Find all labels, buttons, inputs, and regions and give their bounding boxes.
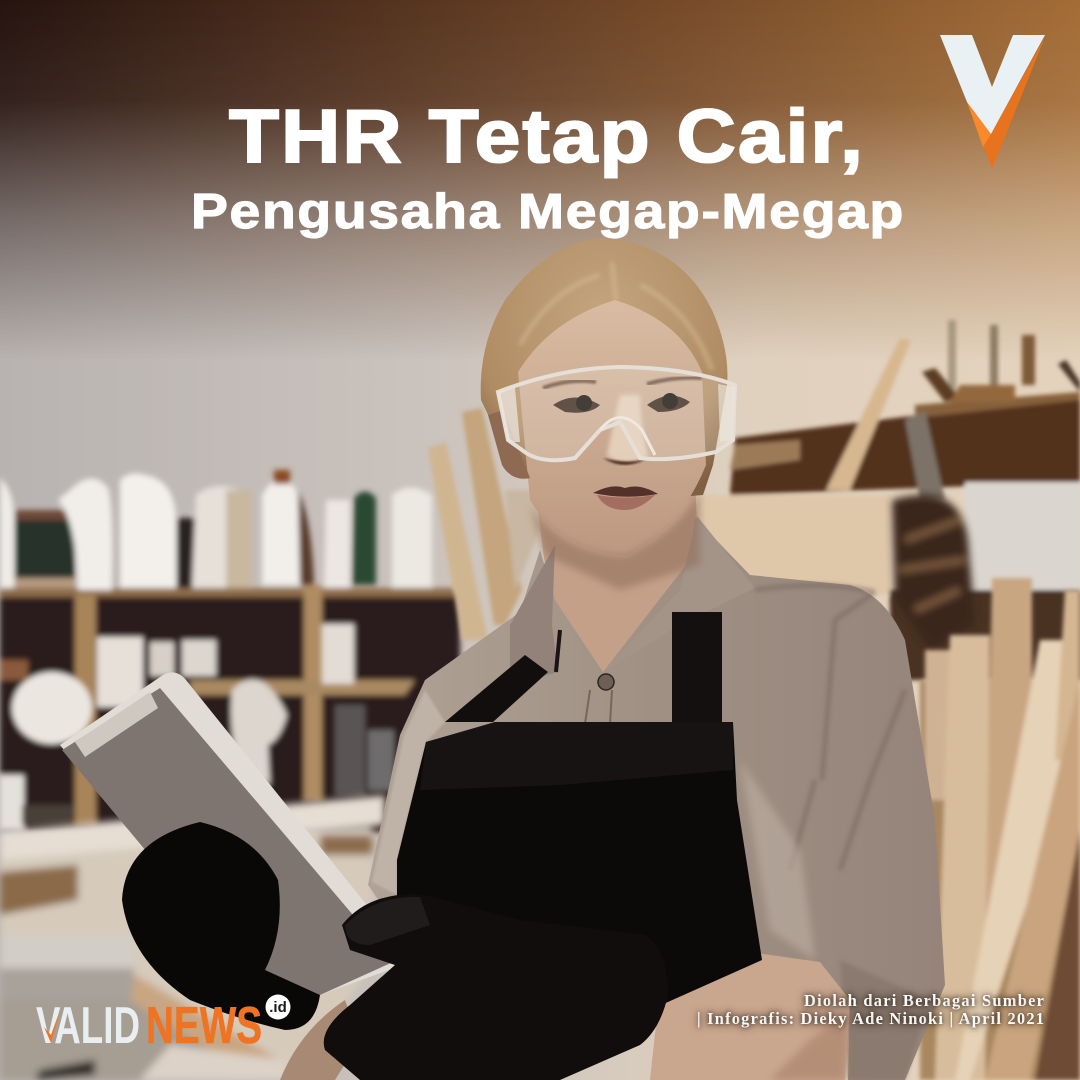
hair: [481, 238, 727, 500]
background: leaning wood boards behind shoulder: [428, 408, 540, 640]
safety goggles: [498, 367, 735, 460]
tablet: [60, 672, 407, 1000]
forearm: [650, 940, 850, 1080]
nose: [607, 395, 648, 464]
background: counter and workbench lower left: [0, 795, 385, 1080]
left gloved hand: [122, 822, 320, 1030]
title: Pengusaha Megap-Megap: [191, 185, 905, 239]
neck: [535, 480, 700, 680]
shelf contents: [0, 624, 394, 830]
shirt: [368, 518, 945, 1080]
title: THR Tetap Cair,: [229, 94, 865, 178]
face: [518, 300, 706, 556]
source credit: Diolah dari Berbagai Sumber: [804, 991, 1044, 1010]
source credit: | Infografis: Dieky Ade Ninoki | April 2021: [697, 1009, 1044, 1028]
logo: VALIDNEWS.id bottom left: VALID: [36, 997, 140, 1055]
ear: [488, 410, 530, 479]
hair highlight: [520, 262, 712, 370]
left sleeve light: [372, 690, 445, 895]
apron: [397, 612, 762, 1010]
jaw shadow: [530, 490, 700, 590]
source credit: [697, 991, 1044, 1028]
lips: [593, 486, 658, 497]
shirt folds: [755, 585, 905, 870]
shirt collar: [510, 516, 755, 724]
title: [191, 94, 905, 239]
logo: VALIDNEWS.id bottom left: .id: [269, 999, 287, 1016]
background: right wall tool rack and wood planks: [428, 320, 1080, 1080]
logo: VALIDNEWS.id bottom left: [36, 994, 290, 1055]
bottles row: [0, 470, 432, 590]
background: left shelves with bottles: [0, 470, 460, 832]
logo: V mark top right: [940, 35, 1045, 169]
woman figure: [60, 238, 945, 1080]
logo: VALIDNEWS.id bottom left: NEWS: [146, 997, 262, 1055]
eyes and eyebrows: [543, 378, 702, 413]
right gloved hand: [324, 894, 668, 1080]
